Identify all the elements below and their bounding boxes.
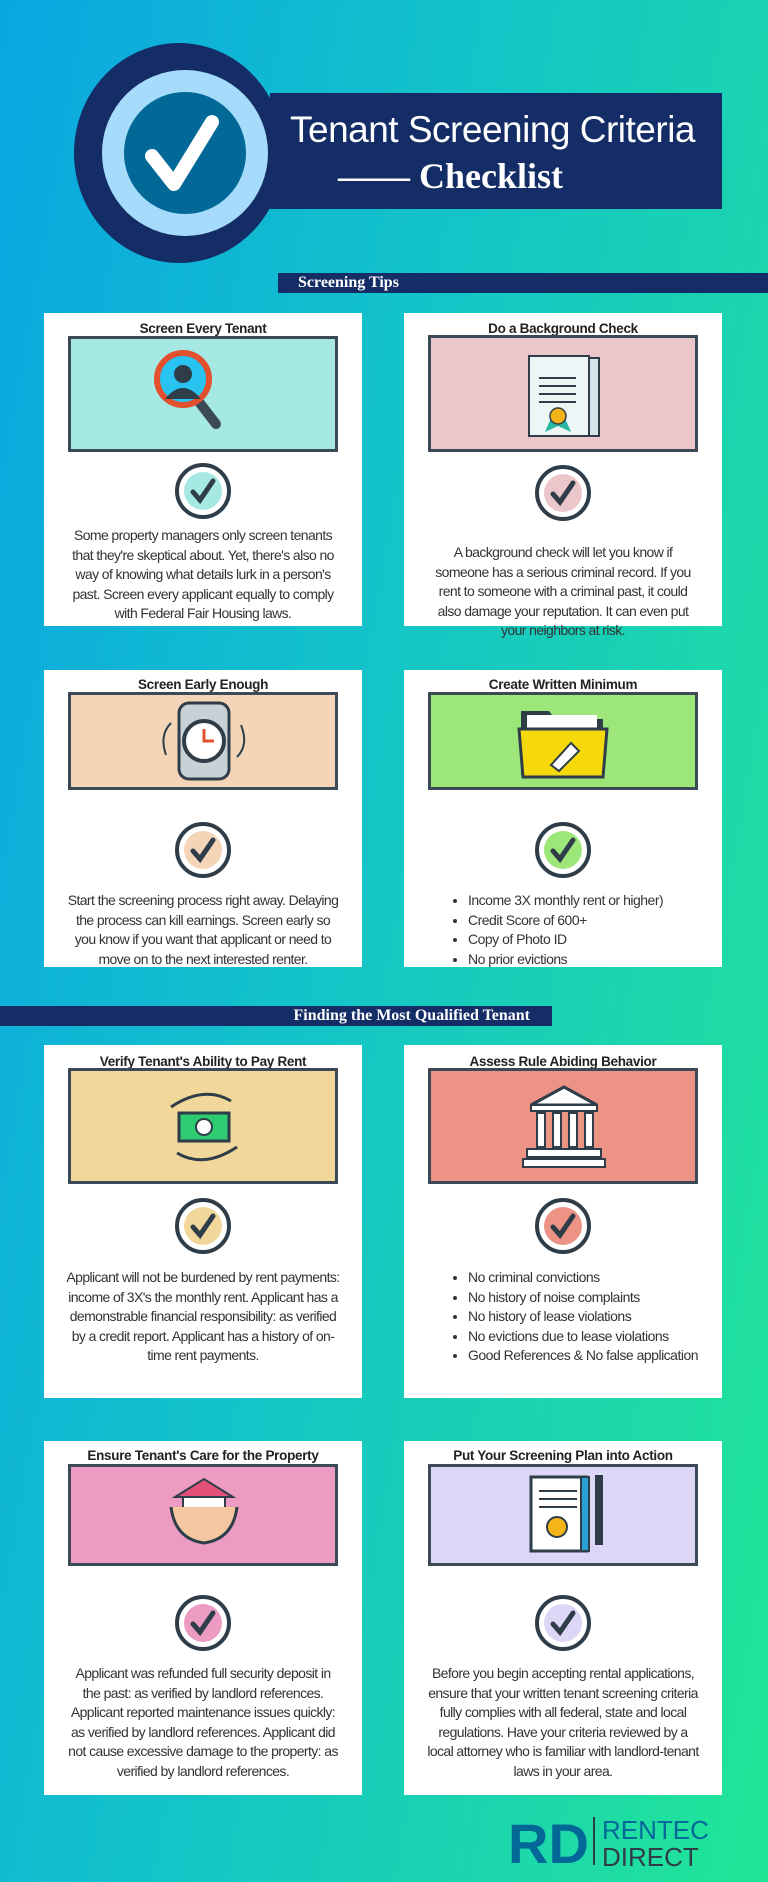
panel: Verify Tenant's Ability to Pay Rent: Verify Tenant's Ability to Pay Rent bbox=[100, 1054, 306, 1069]
icon: clock bbox=[68, 692, 338, 790]
logo: Rentec Direct bbox=[508, 1813, 709, 1869]
text: Applicant will not be burdened by rent payments: income of 3X's the monthly rent. Applicant has a demonstrable financial responsibility: as verified by a credit report. Applicant has a history of on-time rent payments. bbox=[66, 1269, 340, 1363]
panel: Ensure Tenant's Care for the Property: Ensure Tenant's Care for the Property bbox=[87, 1448, 319, 1463]
icon: hands house bbox=[68, 1464, 338, 1566]
panel: Screen Early Enough: Screen Early Enough bbox=[138, 677, 268, 692]
title text: Tenant Screening Criteria bbox=[290, 109, 695, 150]
section bar: Screening Tips bbox=[278, 273, 768, 293]
panel: Verify Tenant's Ability to Pay Rent bbox=[44, 1045, 362, 1398]
check icon bbox=[535, 1198, 591, 1254]
icon: certificate bbox=[428, 335, 698, 452]
section bar: Finding the Most Qualified Tenant bbox=[0, 1006, 552, 1026]
check icon bbox=[535, 1595, 591, 1651]
bullet list: Good References & No false application bbox=[468, 1347, 698, 1363]
section bar: Finding the Most Qualified Tenant: Finding the Most Qualified Tenant bbox=[294, 1007, 530, 1024]
panel: Screen Early Enough bbox=[44, 670, 362, 967]
bullet list: Copy of Photo ID bbox=[468, 931, 567, 947]
icon: big check bbox=[102, 70, 268, 236]
text: Before you begin accepting rental applications, ensure that your written tenant screening criteria fully complies with all federal, state and local regulations. Have your criteria reviewed by a local attorney who is familiar with landlord-tenant laws in your area. bbox=[427, 1665, 699, 1778]
section bar: Screening Tips: Screening Tips bbox=[298, 274, 399, 291]
icon: magnifier bbox=[68, 336, 338, 452]
panel: Assess Rule Abiding Behavior: Assess Rule Abiding Behavior bbox=[470, 1054, 656, 1069]
bullet list: No history of noise complaints bbox=[468, 1288, 640, 1304]
subtitle: —— Checklist bbox=[338, 156, 563, 196]
check icon bbox=[535, 822, 591, 878]
bullet list: No criminal convictions bbox=[468, 1269, 600, 1285]
bullet list: Income 3X monthly rent or higher) bbox=[468, 892, 663, 908]
check icon bbox=[175, 1595, 231, 1651]
logo: Rentec Direct: RENTEC bbox=[602, 1815, 709, 1845]
panel: Create Written Minimum bbox=[404, 670, 722, 967]
panel: Put Your Screening Plan into Action bbox=[404, 1441, 722, 1795]
text: Start the screening process right away. Delaying the process can kill earnings. Screen early so you know if you want that applicant or need to move on to the next interested renter. bbox=[68, 892, 338, 966]
icon: courthouse bbox=[428, 1068, 698, 1184]
panel: Screen Every Tenant: Screen Every Tenant bbox=[140, 321, 266, 336]
icon: document and pen bbox=[428, 1464, 698, 1566]
panel: Ensure Tenant's Care for the Property bbox=[44, 1441, 362, 1795]
panel: Put Your Screening Plan into Action: Put Your Screening Plan into Action bbox=[453, 1448, 673, 1463]
panel: Assess Rule Abiding Behavior bbox=[404, 1045, 722, 1398]
bullet list bbox=[453, 892, 663, 967]
panel: Do a Background Check: Do a Background Check bbox=[488, 321, 638, 336]
panel: Create Written Minimum: Create Written Minimum bbox=[489, 677, 637, 692]
bullet list bbox=[453, 1269, 698, 1363]
bullet list: Credit Score of 600+ bbox=[468, 912, 587, 928]
icon: folder bbox=[428, 692, 698, 790]
check icon bbox=[175, 463, 231, 519]
title badge circle bbox=[74, 43, 284, 263]
text: Some property managers only screen tenants that they're skeptical about. Yet, there's also no way of knowing what details lurk in a person's past. Screen every applicant equally to comply with Federal Fair Housing laws. bbox=[72, 527, 334, 621]
check icon bbox=[175, 1198, 231, 1254]
icon: money bbox=[68, 1068, 338, 1184]
panel: Do a Background Check bbox=[404, 313, 722, 626]
bullet list: No evictions due to lease violations bbox=[468, 1328, 669, 1344]
bullet list: No history of lease violations bbox=[468, 1308, 631, 1324]
bullet list: No prior evictions bbox=[468, 950, 567, 966]
text: Applicant was refunded full security deposit in the past: as verified by landlord references. Applicant reported maintenance issues quickly: as verified by landlord references. Applicant did not cause excessive damage to the property: as verified by landlord references. bbox=[68, 1665, 338, 1778]
text: A background check will let you know if someone has a serious criminal record. If you rent to someone with a criminal past, it could also damage your reputation. It can even put your neighbors at risk. bbox=[435, 544, 691, 638]
check icon bbox=[535, 465, 591, 521]
title banner bbox=[270, 93, 722, 209]
check icon bbox=[175, 822, 231, 878]
panel: Screen Every Tenant bbox=[44, 313, 362, 626]
